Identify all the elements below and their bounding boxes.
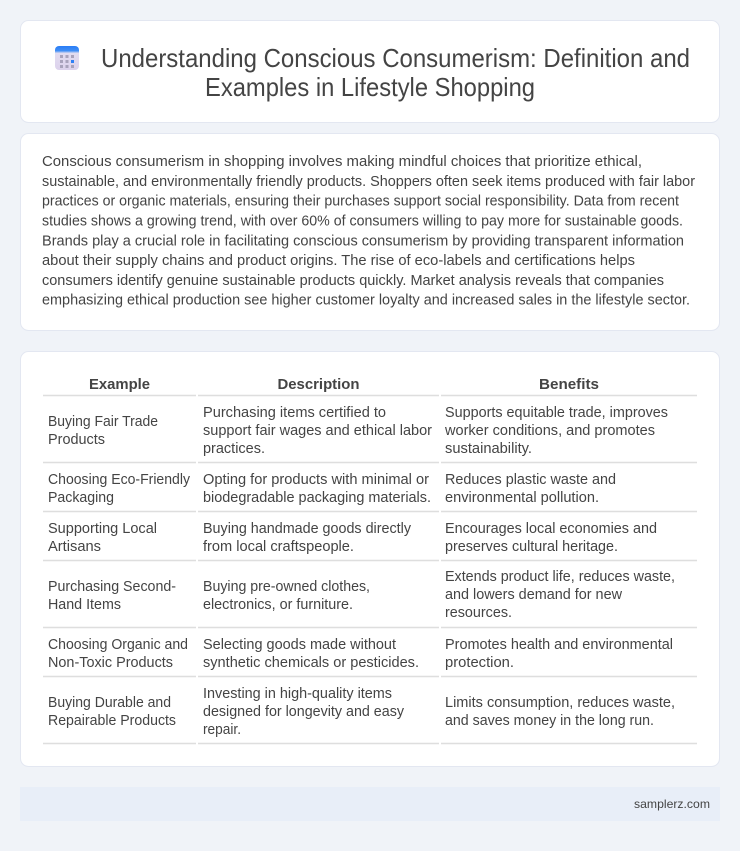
row: fair trade: Buying Fair Trade [48, 414, 158, 430]
row: fair trade [48, 405, 668, 457]
row: organic products: synthetic chemicals or pesticides. [203, 655, 419, 671]
text block: introduction paragraph [42, 154, 695, 308]
row: eco-friendly packaging: Choosing Eco-Friendly [48, 472, 191, 488]
row: fair trade: Purchasing items certified to [203, 405, 386, 421]
table header [89, 377, 599, 393]
text block: introduction paragraph: studies shows a growing trend, with over 60% of consumers willing to pay more for sustainable goods. [42, 214, 683, 230]
text block: introduction paragraph: Brands play a crucial role in facilitating conscious consumerism by providing transparent information [42, 234, 684, 250]
row: durable products: repair. [203, 722, 241, 738]
row: durable products: Limits consumption, reduces waste, [445, 695, 675, 711]
row: second-hand items: and lowers demand for new [445, 587, 623, 603]
table header: Example [89, 377, 150, 393]
row: eco-friendly packaging: environmental pollution. [445, 490, 599, 506]
row: local artisans: preserves cultural heritage. [445, 539, 618, 555]
row: organic products [48, 637, 673, 671]
row: fair trade: Products [48, 432, 105, 448]
row: organic products: Promotes health and environmental [445, 637, 673, 653]
title: Examples in Lifestyle Shopping [205, 74, 535, 102]
table header: Benefits [539, 377, 599, 393]
row: second-hand items [48, 569, 675, 621]
row: durable products: designed for longevity and easy [203, 704, 405, 720]
row: durable products: Repairable Products [48, 713, 176, 729]
panel: introduction [20, 134, 720, 330]
row: durable products: Buying Durable and [48, 695, 171, 711]
text block: introduction paragraph: consumers identify genuine sustainable products quickly. Market analysis reveals that companies [42, 273, 664, 289]
row: organic products: Selecting goods made without [203, 637, 396, 653]
row: second-hand items: electronics, or furniture. [203, 597, 353, 613]
row: local artisans: Encourages local economies and [445, 521, 657, 537]
row: durable products [48, 686, 675, 738]
row: local artisans: from local craftspeople. [203, 539, 354, 555]
panel: examples table [20, 352, 720, 766]
panel: title card [20, 20, 720, 122]
text block: introduction paragraph: about their supply chains and product origins. The rise of eco-labels and certifications helps [42, 253, 635, 269]
row: second-hand items: Buying pre-owned clothes, [203, 579, 370, 595]
row: organic products: protection. [445, 655, 514, 671]
row: organic products: Choosing Organic and [48, 637, 188, 653]
row: second-hand items: Hand Items [48, 597, 121, 613]
row: fair trade: sustainability. [445, 441, 532, 457]
row: organic products: Non-Toxic Products [48, 655, 173, 671]
row: durable products: and saves money in the long run. [445, 713, 654, 729]
text block: introduction paragraph: practices or organic materials, ensuring their purchases support social responsibility. Data from recent [42, 194, 679, 210]
text block: introduction paragraph: Conscious consumerism in shopping involves making mindful choices that prioritize ethical, [42, 154, 642, 170]
row: fair trade: Supports equitable trade, improves [445, 405, 668, 421]
row: eco-friendly packaging: biodegradable packaging materials. [203, 490, 431, 506]
text block: introduction paragraph: sustainable, and environmentally friendly products. Shoppers often seek items produced with fair labor [42, 174, 695, 190]
row: fair trade: practices. [203, 441, 265, 457]
icon: calendar [55, 46, 79, 70]
row: second-hand items: Purchasing Second- [48, 579, 176, 595]
row: local artisans [48, 521, 657, 555]
row: second-hand items: Extends product life, reduces waste, [445, 569, 675, 585]
table header: Description [278, 377, 360, 393]
row: eco-friendly packaging: Reduces plastic waste and [445, 472, 616, 488]
row: eco-friendly packaging: Packaging [48, 490, 114, 506]
footer: samplerz.com [634, 797, 710, 811]
row: second-hand items: resources. [445, 605, 512, 621]
row: durable products: Investing in high-quality items [203, 686, 392, 702]
row: fair trade: worker conditions, and promotes [444, 423, 655, 439]
footer [20, 787, 720, 821]
row: local artisans: Artisans [48, 539, 101, 555]
row: fair trade: support fair wages and ethical labor [203, 423, 432, 439]
text block: introduction paragraph: emphasizing ethical production see higher customer loyalty and increased sales in the lifestyle sector. [42, 292, 690, 308]
title [101, 45, 690, 102]
table row lines [43, 396, 697, 744]
row: local artisans: Supporting Local [48, 521, 157, 537]
title: Understanding Conscious Consumerism: Definition and [101, 45, 690, 73]
row: eco-friendly packaging [48, 472, 616, 506]
row: eco-friendly packaging: Opting for products with minimal or [203, 472, 429, 488]
row: local artisans: Buying handmade goods directly [203, 521, 412, 537]
